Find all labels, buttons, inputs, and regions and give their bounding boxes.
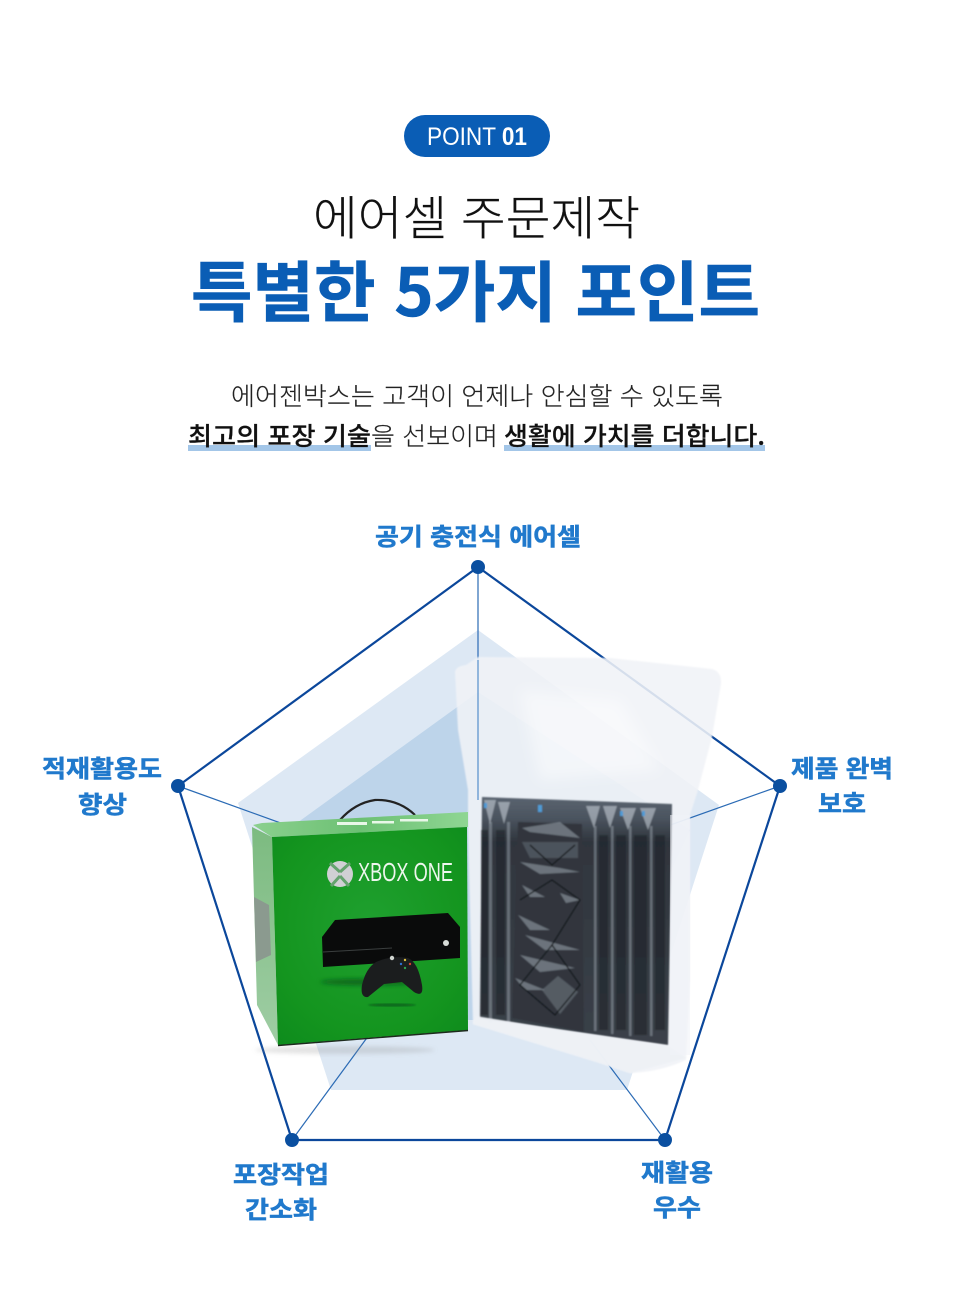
label: left: 적재활용도 [42, 749, 162, 784]
flap lettering [337, 819, 428, 825]
radar chart [171, 560, 787, 1147]
right bag edge [670, 815, 690, 1055]
bag bottom overlay [473, 1016, 686, 1073]
center wrinkled panel [512, 822, 584, 1032]
label: bottom right: 우수 [653, 1188, 701, 1223]
label: right: 보호 [818, 784, 866, 819]
box handle [340, 800, 415, 820]
seal markers [484, 803, 645, 816]
chart nodes [171, 560, 787, 1147]
xbox logo [327, 861, 353, 887]
text block: description [188, 377, 765, 453]
text block: description: 생활에 가치를 더합니다. [504, 417, 765, 453]
box front [272, 827, 468, 1045]
air column darks [481, 830, 665, 1035]
text block: description: 최고의 포장 기술 [188, 417, 371, 453]
label: bottom right [641, 1153, 713, 1223]
label: top: 공기 충전식 에어셀 [375, 517, 581, 552]
label: bottom right: 재활용 [641, 1153, 713, 1188]
title: second line: 특별한 5가지 포인트 [191, 240, 760, 336]
label: right: 제품 완벽 [791, 749, 893, 784]
label: bottom left: 포장작업 [233, 1155, 329, 1190]
label: bottom left: 간소화 [245, 1190, 317, 1225]
controller shadow [368, 1003, 416, 1007]
label: bottom left [233, 1155, 329, 1225]
text block: description: 을 선보이며 [371, 417, 498, 453]
box side [252, 827, 278, 1045]
box side image [254, 897, 271, 962]
label: left: 향상 [78, 785, 127, 820]
soft shadow under box [255, 1046, 435, 1054]
badge: POINT 01 [404, 115, 550, 157]
label: right [791, 749, 893, 819]
product photo [252, 657, 721, 1073]
chart spokes [178, 567, 780, 1140]
box top flap [253, 812, 468, 837]
console shadow on box [320, 978, 420, 986]
text block: description: 에어젠박스는 고객이 언제나 안심할 수 있도록 [231, 377, 723, 413]
box bottom edge [278, 1030, 468, 1046]
label: left [42, 749, 162, 820]
air column highlights [489, 822, 652, 1036]
console on box [322, 913, 460, 967]
controller [362, 956, 422, 997]
xbox text: XBOX ONE [358, 857, 453, 887]
console inside bag [480, 797, 672, 1045]
air cell bag [455, 657, 721, 1073]
badge: POINT 01: POINT 01 [427, 123, 527, 151]
title: first line: 에어셀 주문제작 [313, 180, 640, 249]
chart area: inner pentagon [290, 692, 690, 1020]
console logo [443, 940, 449, 946]
chart area: outer pentagon [238, 630, 719, 1090]
console disc slot [323, 948, 392, 952]
bag seal tabs [484, 800, 656, 830]
chart outline [178, 567, 780, 1140]
